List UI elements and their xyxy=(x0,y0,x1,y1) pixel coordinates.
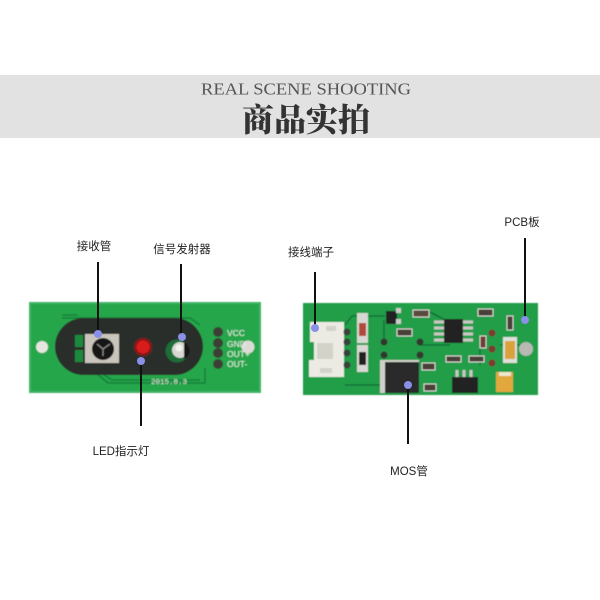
callout dot xyxy=(311,324,319,332)
callout dot xyxy=(137,357,145,365)
resistors near MOS xyxy=(422,363,436,391)
right mounting hole xyxy=(242,340,254,354)
regulator U3 xyxy=(452,370,478,393)
label: emitter: 信号发射器 xyxy=(153,242,211,256)
callout line: PCB xyxy=(521,238,529,324)
pin labels xyxy=(227,328,250,369)
header banner xyxy=(0,75,600,141)
callout dot xyxy=(521,316,529,324)
connector pads xyxy=(213,327,223,369)
trace outline xyxy=(62,315,205,383)
label: MOS: MOS管 xyxy=(390,464,428,478)
callout line: MOS xyxy=(404,381,412,444)
pin labels: OUT- xyxy=(227,359,247,369)
callout dot xyxy=(404,381,412,389)
traces xyxy=(345,312,520,385)
label: LED indicator: LED指示灯 xyxy=(93,444,150,458)
black sensor window xyxy=(55,318,203,375)
left mounting hole xyxy=(36,341,48,353)
callout line: receiver xyxy=(94,262,102,338)
white JST connector xyxy=(309,322,350,377)
tantalum capacitor C1 xyxy=(503,337,517,363)
pin labels: VCC xyxy=(227,328,245,338)
via pads xyxy=(380,330,496,366)
callout dot xyxy=(94,330,102,338)
label: receiver: 接收管 xyxy=(77,239,111,253)
callout line: emitter xyxy=(178,264,186,341)
label: PCB board: PCB板 xyxy=(504,215,540,229)
date code: 2015.8.3 xyxy=(151,379,187,387)
pin labels: OUT+ xyxy=(227,349,250,359)
MOS transistor xyxy=(380,360,419,393)
panel: front of circuit board xyxy=(29,302,261,393)
header subtitle: REAL SCENE SHOOTING xyxy=(201,80,411,98)
diodes xyxy=(357,313,368,372)
emitter tube xyxy=(166,340,190,362)
callout line: LED xyxy=(137,357,145,426)
red LED xyxy=(134,338,152,356)
small resistors and transistor xyxy=(386,308,513,362)
mounting hole xyxy=(519,342,533,356)
SOIC chip U1 xyxy=(434,319,473,343)
callout dot xyxy=(178,333,186,341)
pin labels: GND xyxy=(227,339,246,349)
callout line: connector xyxy=(311,272,319,332)
header title: 商品实拍 xyxy=(242,95,370,141)
tantalum capacitor C2 xyxy=(496,372,513,392)
label: connector: 接线端子 xyxy=(288,245,334,259)
receiver tube xyxy=(75,334,119,363)
panel: back of circuit board xyxy=(303,303,538,395)
